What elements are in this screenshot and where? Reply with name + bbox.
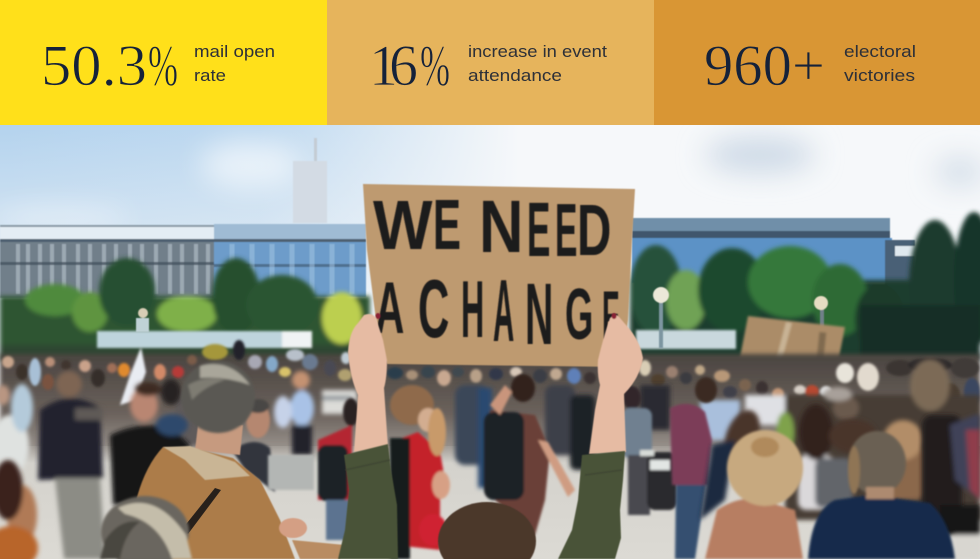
sign lettering: A <box>493 261 514 360</box>
stat label: attendance <box>468 67 562 85</box>
bag strap <box>183 488 221 534</box>
forearm and hand <box>348 314 388 452</box>
person: man with backpack and brown shirt <box>484 374 575 535</box>
sign lettering: E <box>527 186 550 273</box>
panel background <box>654 0 980 125</box>
stat panel: electoral victories <box>654 0 980 125</box>
cardboard and hand at bottom <box>279 518 345 559</box>
person: dark-haired woman behind <box>700 405 767 520</box>
building left <box>0 224 366 298</box>
low white pavilions <box>97 330 736 349</box>
stat number: % <box>148 33 178 98</box>
person: in dark coat behind <box>232 399 275 492</box>
sign lettering: N <box>479 186 523 268</box>
mid-ground people bodies <box>175 359 980 520</box>
person: grey-blue top and child stroller <box>622 386 677 515</box>
panel background <box>327 0 654 125</box>
sleeve folds <box>345 460 622 475</box>
stat label: rate <box>194 67 226 85</box>
neck <box>195 425 243 455</box>
person: grey-haired woman in tan jacket <box>135 361 295 559</box>
nail <box>376 313 380 319</box>
stat label: mail open <box>194 43 275 61</box>
protest sign <box>363 184 635 367</box>
panel background <box>0 0 327 125</box>
cardboard <box>363 184 635 367</box>
sign lettering: D <box>577 190 611 272</box>
people at far right <box>922 415 980 559</box>
stat label: increase in event <box>468 43 607 61</box>
stat panel: mail open rate <box>0 0 327 125</box>
trees <box>0 212 980 361</box>
sign lettering: F <box>602 279 619 355</box>
sign lettering: E <box>555 189 577 273</box>
crowd base and ground <box>0 354 980 559</box>
stat label: electoral <box>844 43 916 61</box>
tower <box>293 138 327 223</box>
sky <box>0 125 980 355</box>
nail <box>612 313 616 319</box>
hood <box>163 446 250 480</box>
brown-haired head at bottom centre <box>438 502 536 559</box>
sign lettering: A <box>375 266 404 349</box>
person: man in purple hoodie <box>670 377 717 559</box>
person: woman in red t-shirt <box>390 385 450 559</box>
grey hair <box>181 361 255 433</box>
person: bearded man in black <box>110 379 190 505</box>
street lamps <box>136 287 828 348</box>
stat number: 16 <box>369 33 418 98</box>
tan jacket <box>135 447 295 559</box>
clouds <box>0 137 980 228</box>
photo: protest crowd with sign <box>0 125 980 559</box>
right green sleeve <box>558 451 625 559</box>
person: left front with orange top <box>0 460 38 559</box>
person: man in navy sweater <box>808 431 955 559</box>
stat label: victories <box>844 67 915 85</box>
sign lettering: H <box>461 265 484 355</box>
building right <box>632 218 915 290</box>
background crowd <box>2 340 980 410</box>
stat number: 960+ <box>704 33 825 98</box>
person: with black backpack <box>318 398 359 540</box>
sign lettering: E <box>433 186 461 265</box>
sign lettering: W <box>373 187 433 265</box>
sign lettering: N <box>525 267 553 363</box>
person: standing in dark jacket <box>38 371 105 559</box>
stat number: 50.3 <box>41 33 147 98</box>
sign lettering: G <box>565 274 593 355</box>
stat number <box>369 33 450 98</box>
sign lettering: C <box>418 262 449 355</box>
stat number: % <box>420 33 450 98</box>
barrier <box>268 455 314 490</box>
background sign <box>736 316 845 388</box>
person: ginger hair with brown coat <box>883 420 924 500</box>
person: woman with dark hair in white top <box>798 404 877 510</box>
forearm and hand <box>589 315 643 454</box>
right arm holding sign <box>589 313 643 454</box>
person: blonde woman <box>705 430 803 559</box>
stat panel: event attendance <box>327 0 654 125</box>
left green sleeve <box>338 444 398 559</box>
person: blonde-grey head foreground <box>100 496 192 559</box>
sign lettering <box>373 186 619 363</box>
person: left white shirt <box>0 384 33 475</box>
left arm holding sign <box>348 313 388 452</box>
